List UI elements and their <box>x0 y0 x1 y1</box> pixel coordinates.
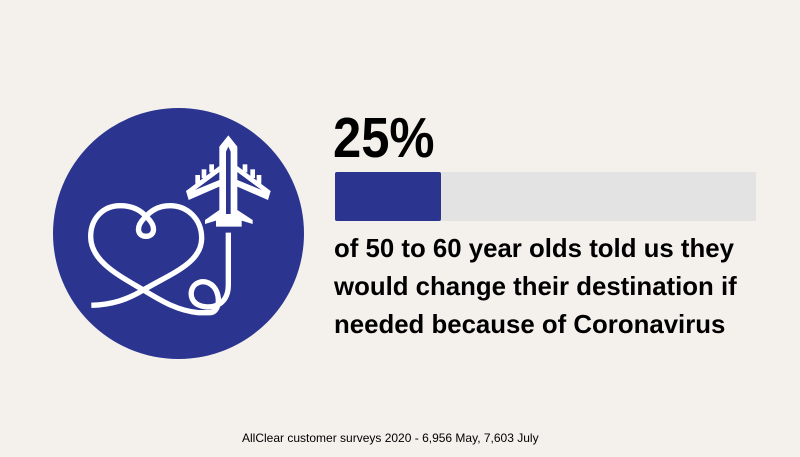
source footnote: AllClear customer surveys 2020 - 6,956 May, 7,603 July <box>242 431 539 445</box>
description text: needed because of Coronavirus <box>334 311 725 339</box>
description text: would change their destination if <box>334 273 737 301</box>
description text <box>334 235 737 339</box>
description text: of 50 to 60 year olds told us they <box>334 235 734 263</box>
headline percentage: 25% <box>333 106 435 170</box>
progress bar <box>335 172 756 221</box>
progress bar fill: 25% <box>335 172 441 221</box>
